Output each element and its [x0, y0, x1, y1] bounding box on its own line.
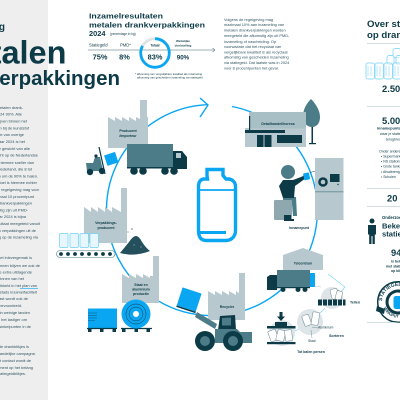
title	[0, 22, 120, 90]
text block: regulation note: vergelijkbare kwaliteit is als recyclaat	[224, 49, 288, 54]
text block: left sidebar copy	[0, 105, 41, 376]
chart: collection results table: 83%	[148, 52, 163, 62]
stat: awareness of deposit	[382, 215, 400, 273]
icon: aluminium block and coil	[87, 300, 152, 332]
icon: store	[245, 99, 320, 147]
label: Verpakkingsproducent	[95, 221, 118, 230]
icon: deposit stamp: WINGPUT	[384, 306, 399, 318]
chart: collection results table: 90%	[177, 54, 190, 62]
arrow: recycling loop	[106, 98, 317, 316]
label: Staal en aluminium productie: Staal en	[134, 283, 148, 287]
chart: collection results table: Totaal	[150, 44, 160, 48]
label: Staal en aluminium productie: aluminium	[132, 288, 150, 292]
heading: collection results	[89, 12, 206, 38]
icon: deposit stamp	[376, 281, 400, 323]
icon: reverse vending machine	[289, 158, 344, 230]
stat: 20: 20	[387, 192, 397, 204]
text block: regulation note: maximaal 10% aan inzameling van	[224, 22, 284, 27]
label: Staal en aluminium productie	[132, 283, 150, 296]
label: Producent / importeur	[119, 129, 137, 138]
label: Innamepunt: Innamepunt	[289, 226, 310, 230]
chart: collection results table: PMD*	[120, 42, 131, 48]
chart: collection results table: doelstelling	[175, 44, 192, 48]
icon: cans on conveyor	[56, 234, 115, 258]
icon: sorting step	[292, 308, 344, 343]
label: Producent / importeur: Producent	[119, 129, 137, 133]
text block: regulation note: voorwaarde dat het recyclaat van	[224, 44, 281, 49]
footnote: * afkomstig van vergelijkbare kwaliteit als inzameling	[135, 72, 203, 76]
icon: sorting step: Aluminium	[318, 326, 334, 330]
text block: regulation note: metalen drankverpakkingen worden	[224, 27, 286, 32]
stat: 5.000 collection points	[377, 115, 400, 179]
heading: collection results: 2024	[89, 29, 106, 38]
label: Verpakkingsproducent: Verpakkings-	[95, 221, 118, 225]
label: Producent / importeur: /importeur	[119, 134, 137, 138]
heading: collection results: (percentage in kg)	[110, 32, 136, 36]
text block: regulation note: afkomstig van gescheiden inzameling	[224, 54, 289, 60]
icon: central can	[198, 170, 236, 240]
footnote: afkomstig van gescheiden inzameling via statiegeld	[137, 76, 203, 80]
panel: left sidebar background	[0, 0, 48, 400]
heading: about deposit	[367, 19, 400, 41]
icon: steel and aluminium factory	[122, 256, 161, 303]
icon: forklift	[86, 147, 118, 175]
icon: wheel loader	[176, 287, 252, 351]
label: Recycler: Recycler	[220, 305, 235, 309]
heading: collection results: Inzamelresultaten	[89, 12, 164, 20]
icon: person	[368, 218, 376, 244]
icon: pile of granulate	[120, 228, 150, 255]
text block: regulation note	[224, 17, 290, 70]
label: Tellen: Tellen	[350, 300, 360, 304]
label: Sorteren: Sorteren	[329, 334, 344, 338]
label: Verpakkingsproducent: producent	[97, 226, 115, 230]
icon: producer factory	[108, 100, 148, 148]
label: Tot balen persen: Tot balen persen	[297, 350, 325, 354]
label: Staal en aluminium productie: productie	[133, 292, 149, 296]
icon: baling press	[267, 312, 325, 354]
chart: collection results table: Statiegeld	[89, 42, 108, 48]
text block: regulation note: via statiegeld. Dat laatste was in 2024	[224, 60, 290, 65]
text block: regulation note: voor 8 procentpunten het geval.	[224, 66, 279, 70]
panel: right column statistics	[366, 19, 400, 323]
icon: tree	[303, 99, 320, 144]
stat: 5.000 collection points: • Scholen	[381, 175, 396, 179]
label: Telcentrum: Telcentrum	[294, 262, 312, 266]
chart: collection results table: 8%	[119, 52, 130, 62]
text block: regulation note: Volgens de regelgeving mag	[224, 17, 273, 22]
icon: delivery truck	[127, 144, 187, 175]
chart: collection results table: 75%	[93, 52, 108, 62]
chart: collection results table: Wettelijke	[176, 39, 190, 43]
icon: person returning can	[274, 165, 319, 221]
heading: collection results: metalen drankverpakkingen	[89, 20, 206, 30]
text block: regulation note: inzameling of nascheiding. Op	[224, 39, 276, 44]
chart: collection results table	[88, 39, 215, 67]
footnote	[135, 72, 203, 80]
icon: counting step	[318, 274, 360, 309]
icon: recycler factory	[208, 273, 245, 320]
text block: regulation note: meegeteld die afkomstig zijn uit PMD-	[224, 33, 290, 38]
icon: packaging factory	[84, 188, 127, 243]
icon: counting centre and truck	[267, 248, 323, 292]
icon: sorting step: Staal	[308, 339, 316, 343]
label: Detailhandel/horeca: Detailhandel/horeca	[261, 122, 295, 126]
icon: pile of cans	[366, 48, 400, 79]
